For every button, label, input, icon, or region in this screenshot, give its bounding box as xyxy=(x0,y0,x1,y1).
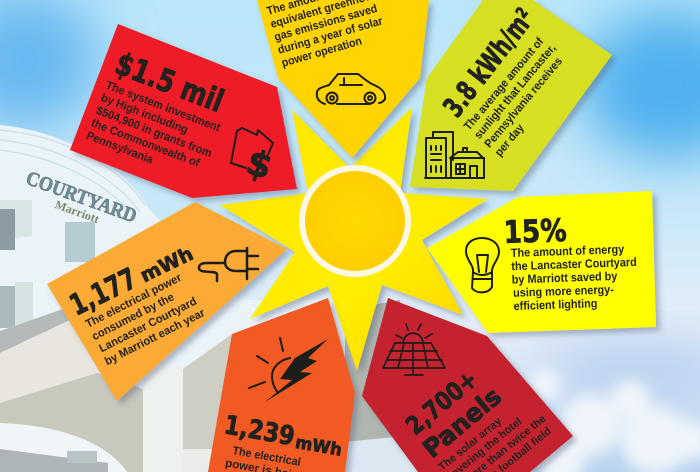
icon: Pennsylvania dollar xyxy=(230,127,274,182)
text: panels description: The solar array xyxy=(436,415,504,472)
icon: sun and lightning xyxy=(249,338,328,402)
heading: 2,700+: 2,700+ xyxy=(400,364,483,441)
heading: 15%: 15% xyxy=(503,213,567,251)
panel: lighting savings xyxy=(427,191,656,333)
heading: 1,177 mWh: mWh xyxy=(137,243,197,287)
text: investment description: $504,900 in grants from xyxy=(94,105,213,160)
panel: sunlight xyxy=(410,0,612,191)
text: sunlight description: Pennsylvania receives xyxy=(483,55,565,150)
sun disc xyxy=(302,168,408,274)
text: lighting description: using more energy- xyxy=(513,284,614,300)
text: consumption description: Lancaster Courtyard xyxy=(97,295,199,355)
text: emissions description: gas emissions saved xyxy=(273,3,379,44)
hotel sign xyxy=(26,172,136,224)
icon: plug xyxy=(199,248,258,281)
text: investment description: the Commonwealth of xyxy=(89,117,201,170)
panel: emissions xyxy=(257,0,429,158)
heading: $1.5 mil: $1.5 mil xyxy=(110,46,229,120)
text: consumption description xyxy=(84,274,204,365)
text: consumption description: by Marriott each year xyxy=(103,307,208,368)
background: hotel building xyxy=(0,125,440,472)
heading: 1,239 mWh xyxy=(225,415,341,456)
text: investment description: by High including xyxy=(99,92,190,137)
text: investment description: Pennsylvania xyxy=(85,130,155,167)
heading: Panels: Panels xyxy=(417,382,507,464)
text: lighting description: by Marriott saved by xyxy=(512,270,618,287)
panel: solar panels xyxy=(362,298,573,472)
heading: 1,239 mWh: 1,239 xyxy=(222,410,297,452)
text: sunlight description: The average amount of xyxy=(462,35,547,133)
heading: 1,177 mWh: 1,177 xyxy=(64,261,142,322)
text: sunlight description: per day xyxy=(493,121,527,159)
text: investment description xyxy=(86,80,221,166)
heading: 1,177 mWh xyxy=(69,248,194,316)
text: consumption description: consumed by the xyxy=(90,291,176,343)
text: consumption description: The electrical power xyxy=(84,271,184,331)
panel: power produced xyxy=(208,298,355,472)
hotel sign: COURTYARD xyxy=(23,167,140,227)
icon: buildings xyxy=(425,132,484,178)
background: clouds xyxy=(529,369,700,472)
sun rays xyxy=(220,107,488,371)
text: lighting description: the Lancaster Courtyard xyxy=(511,256,637,273)
text: power description: The electrical xyxy=(231,444,302,469)
heading: 1,239 mWh: mWh xyxy=(294,433,343,461)
hotel sign: Marriott xyxy=(53,197,101,226)
icon: light bulb xyxy=(466,238,499,292)
icon: solar panel xyxy=(383,324,445,375)
text: lighting description: efficient lighting xyxy=(513,298,598,313)
icon: Pennsylvania dollar: $ xyxy=(241,143,277,188)
text: emissions description: power operation xyxy=(280,35,364,70)
panel: power consumed xyxy=(47,202,287,401)
panel: investment xyxy=(70,24,297,198)
text: emissions description xyxy=(266,0,382,69)
icon: car xyxy=(317,74,385,104)
text: emissions description: during a year of solar xyxy=(277,15,385,57)
text: lighting description: The amount of energy xyxy=(511,244,625,260)
text: investment description: The system investment xyxy=(104,79,222,135)
text: sunlight description: sunlight that Lancaster, xyxy=(472,42,559,142)
text: lighting description xyxy=(511,243,638,313)
